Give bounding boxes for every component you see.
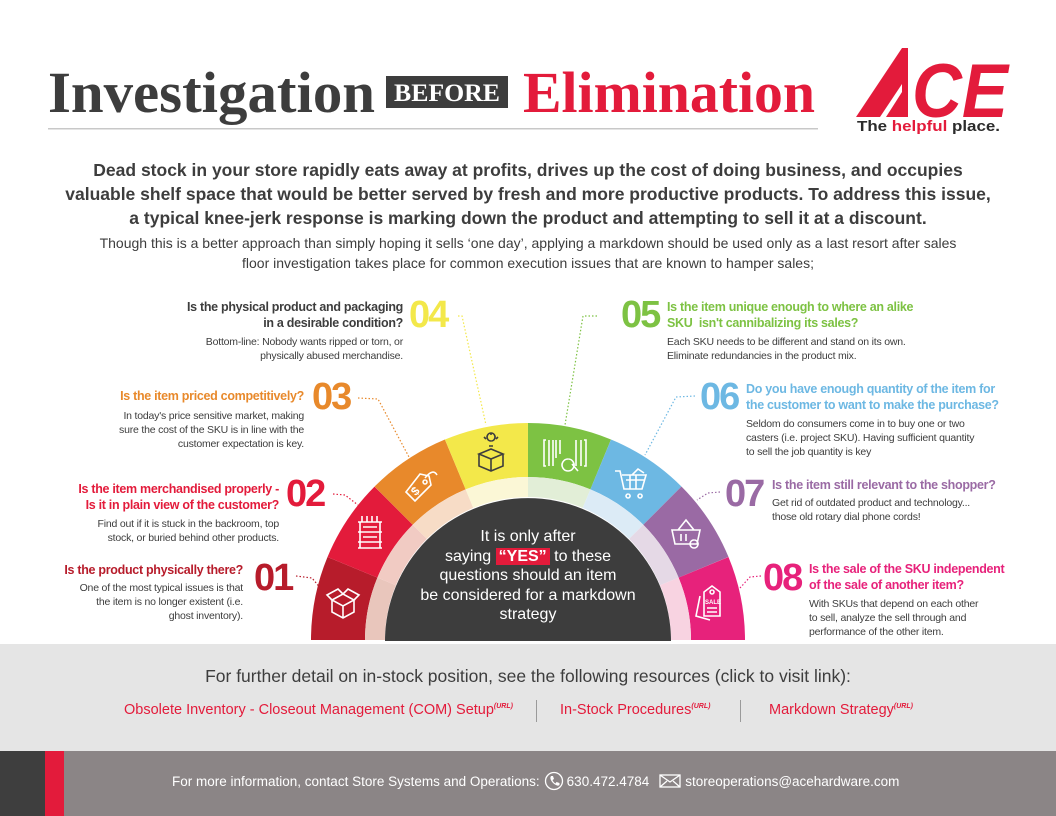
intro paragraph: Dead stock in your store rapidly eats away at profits, drives up the cost of doing business, and occupies xyxy=(93,160,963,180)
item 01: Is the product physically there? xyxy=(64,563,243,577)
item 05 xyxy=(667,300,913,362)
title: Investigation xyxy=(48,60,375,125)
center dark semicircle xyxy=(385,498,671,641)
item 01: ghost inventory). xyxy=(169,610,243,622)
item 07: Get rid of outdated product and technology... xyxy=(772,496,970,508)
number 08: 08 xyxy=(763,557,801,599)
item 08: With SKUs that depend on each other xyxy=(809,598,978,610)
item 07: those old rotary dial phone cords! xyxy=(772,510,920,522)
item 02 xyxy=(78,482,279,544)
item 04: physically abused merchandise. xyxy=(260,350,403,362)
center text xyxy=(420,528,636,623)
item 03: sure the cost of the SKU is in line with the xyxy=(119,424,304,436)
secondary paragraph xyxy=(100,235,956,271)
secondary paragraph: Though this is a better approach than simply hoping it sells ‘one day’, applying a markdown should be used only as a last resort after sales xyxy=(100,235,956,251)
item 03 xyxy=(119,389,304,450)
center text: be considered for a markdown xyxy=(420,586,636,604)
item 06 xyxy=(746,382,999,458)
item 08: Is the sale of the SKU independent xyxy=(809,562,1004,576)
item 06: Do you have enough quantity of the item for xyxy=(746,382,995,396)
icon: barcode xyxy=(544,440,586,471)
number 03: 03 xyxy=(312,376,350,418)
segment 04 xyxy=(445,408,554,518)
semicircle chart xyxy=(296,315,761,641)
icons xyxy=(327,433,721,620)
icon: price tag: $ xyxy=(408,484,423,498)
segment 07 xyxy=(621,487,740,605)
item 04: Is the physical product and packaging xyxy=(187,300,403,314)
icon: shelves xyxy=(358,516,382,548)
item 02: Is it in plain view of the customer? xyxy=(86,498,279,512)
connectors xyxy=(296,316,761,590)
segment 05 xyxy=(528,423,611,508)
item 05: Eliminate redundancies in the product mix. xyxy=(667,350,856,362)
item 02: Is the item merchandised properly - xyxy=(78,482,279,496)
intro paragraph: a typical knee-jerk response is marking down the product and attempting to sell it at a discount. xyxy=(129,208,927,228)
item 04: in a desirable condition? xyxy=(263,316,403,330)
resource links: Markdown Strategy(URL) xyxy=(769,702,913,718)
segment 01 xyxy=(311,557,396,640)
number 07: 07 xyxy=(725,473,763,515)
item 04 xyxy=(187,300,404,362)
item 03: customer expectation is key. xyxy=(178,438,304,450)
secondary paragraph: floor investigation takes place for common execution issues that are known to hamper sales; xyxy=(242,255,814,271)
number 02: 02 xyxy=(286,473,324,515)
icon: box xyxy=(327,589,359,618)
icon: sale tag: SALE xyxy=(705,600,721,606)
item 02: Find out if it is stuck in the backroom, top xyxy=(98,518,279,530)
icon: price tag xyxy=(406,472,437,501)
item 05: Each SKU needs to be different and stand on its own. xyxy=(667,336,906,348)
segment 08 xyxy=(650,557,760,666)
resource links: In-Stock Procedures(URL) xyxy=(560,702,710,718)
logo: ACE xyxy=(856,48,1010,135)
item 06: the customer to want to make the purchase? xyxy=(746,398,999,412)
segment 03 xyxy=(375,428,493,547)
item 01 xyxy=(64,563,244,622)
resources heading: For further detail on in-stock position, see the following resources (click to visit link): xyxy=(205,666,851,686)
item 07 xyxy=(772,478,996,522)
item 07: Is the item still relevant to the shopper? xyxy=(772,478,996,492)
item 03: In today's price sensitive market, making xyxy=(123,410,304,422)
icon: sale tag xyxy=(696,586,721,620)
logo: ACE: The helpful place. xyxy=(857,118,1000,135)
title: Elimination xyxy=(523,60,815,125)
item 01: One of the most typical issues is that xyxy=(80,582,243,594)
intro paragraph: valuable shelf space that would be better served by fresh and more productive products. To address this issue, xyxy=(65,184,991,204)
intro paragraph xyxy=(65,160,991,228)
item 06: Seldom do consumers come in to buy one or two xyxy=(746,418,965,430)
segment 02 xyxy=(328,480,438,589)
icon: cart xyxy=(615,469,646,498)
item 02: stock, or buried behind other products. xyxy=(108,532,279,544)
number 04: 04 xyxy=(409,294,447,336)
item 08: performance of the other item. xyxy=(809,626,944,638)
item 08: to sell, analyze the sell through and xyxy=(809,612,966,624)
segment 06 xyxy=(579,440,688,550)
number 05: 05 xyxy=(621,294,659,336)
center text: It is only after xyxy=(480,528,576,545)
center text: strategy xyxy=(500,606,556,623)
item 03: Is the item priced competitively? xyxy=(120,389,304,403)
contact info: For more information, contact Store Systems and Operations: 630.472.4784 storeoperations@acehardware.com xyxy=(172,774,899,788)
item 05: Is the item unique enough to where an alike xyxy=(667,300,913,314)
resources panel xyxy=(0,644,1056,751)
item 06: to sell the job quantity is key xyxy=(746,446,871,458)
resource links xyxy=(124,700,913,722)
center text: questions should an item xyxy=(440,567,616,584)
item 04: Bottom-line: Nobody wants ripped or torn, or xyxy=(206,336,403,348)
item 08: of the sale of another item? xyxy=(809,578,964,592)
item 08 xyxy=(809,562,1004,638)
resource links: Obsolete Inventory - Closeout Management (COM) Setup(URL) xyxy=(124,702,513,718)
center text: saying “YES” to these xyxy=(445,548,611,564)
icon: box with bulb xyxy=(479,433,503,471)
title xyxy=(48,60,818,130)
logo: ACE: CE xyxy=(912,49,1010,134)
number 01: 01 xyxy=(254,557,292,599)
number 06: 06 xyxy=(700,376,738,418)
item 05: SKU isn't cannibalizing its sales? xyxy=(667,316,858,330)
title: BEFORE xyxy=(394,80,500,107)
item 06: casters (i.e. project SKU). Having sufficient quantity xyxy=(746,432,974,444)
footer xyxy=(0,751,1056,816)
item 01: the item is no longer existent (i.e. xyxy=(96,596,243,608)
icon: basket xyxy=(672,520,700,548)
